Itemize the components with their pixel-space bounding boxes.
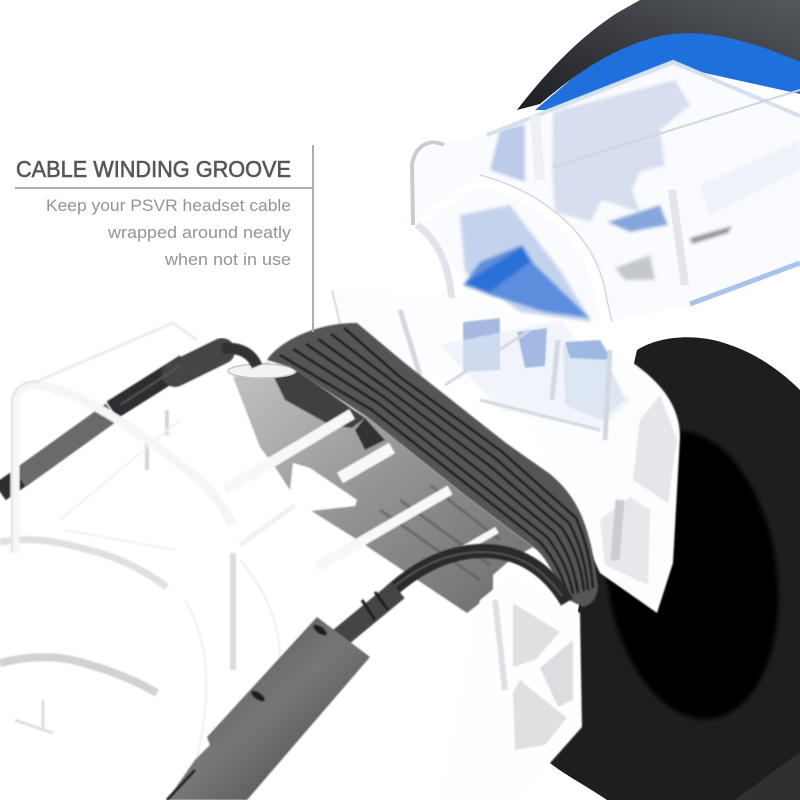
callout: cable winding groove: wrapped around neatly [107,223,292,242]
wound cable bundle [267,323,598,607]
headset ear pad [550,337,800,800]
left cable [0,348,257,553]
acrylic hook over cable [15,385,233,553]
grommet [228,364,296,378]
lower cable and plug [167,551,567,800]
acrylic upper clip [412,62,800,322]
callout: cable winding groove: when not in use [164,250,291,269]
blue reflection in clip [460,205,592,322]
headset band [517,0,800,110]
acrylic lower right block [440,573,582,800]
heading: CABLE WINDING GROOVE [16,156,291,182]
upper clip frame edges and struts [412,62,800,322]
window panes [633,395,677,503]
clear panel reflection patches [552,80,690,222]
acrylic middle block [332,290,680,613]
callout: cable winding groove [15,145,313,332]
acrylic struts over shadow [225,414,497,567]
acrylic lower clip faint lines [0,323,280,780]
dark slits [690,226,732,244]
plug cable [390,551,567,602]
description: Keep your PSVR headset cable [46,196,291,215]
white leaf reflection [290,463,357,511]
strain relief [335,590,398,642]
divider lines [15,145,313,332]
shadow under cable bundle [225,362,533,613]
blue windows [463,318,500,372]
plug body [167,617,370,800]
